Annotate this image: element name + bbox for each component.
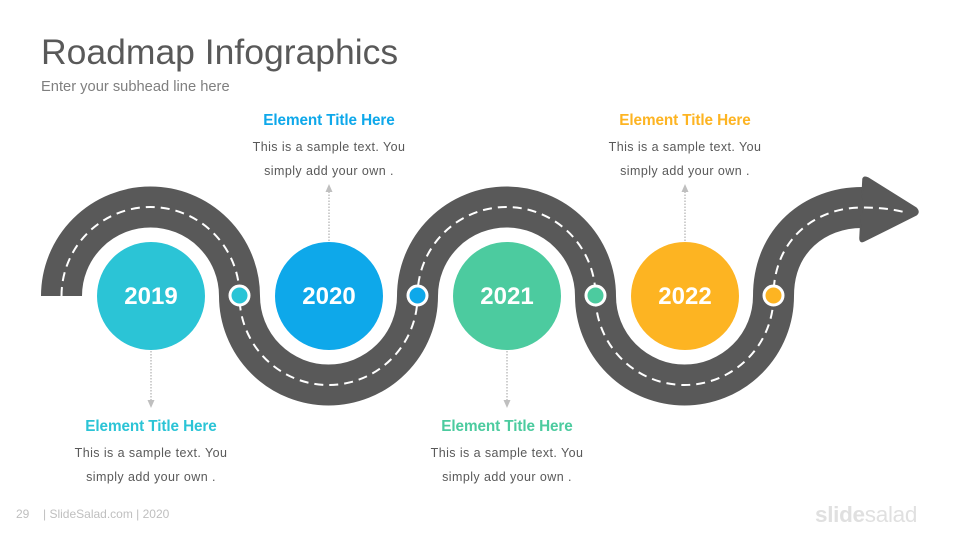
text block: 2021 (430, 418, 583, 484)
text block: 2021: simply add your own . (442, 470, 572, 484)
text block: 2020 (252, 112, 405, 178)
road marker: teal (230, 286, 249, 305)
text block: 2022 (608, 112, 761, 178)
text block: 2020: Element Title Here (263, 112, 395, 129)
road with arrow (62, 177, 918, 385)
circle: 2020: 2020 (302, 283, 356, 310)
circle: 2021: 2021 (480, 283, 534, 310)
arrow: 2021 down (504, 351, 510, 408)
text block: 2019: This is a sample text. You (75, 446, 227, 460)
circle: 2022: 2022 (658, 283, 712, 310)
title: Roadmap Infographics (41, 32, 398, 72)
text block: 2019: Element Title Here (85, 418, 217, 435)
text block: 2020: This is a sample text. You (253, 140, 405, 154)
circle: 2020 (275, 242, 383, 350)
circle: 2022 (631, 242, 739, 350)
text block: 2022: simply add your own . (620, 164, 750, 178)
arrow: 2019 down (148, 351, 154, 408)
arrow: 2020 up (326, 184, 332, 241)
text block: 2022: Element Title Here (619, 112, 751, 129)
text block: 2019: simply add your own . (86, 470, 216, 484)
footer logo: slidesalad (815, 502, 917, 527)
road marker: green (586, 286, 605, 305)
circle: 2021 (453, 242, 561, 350)
circle: 2019: 2019 (124, 283, 178, 310)
road marker: amber (764, 286, 783, 305)
road marker: blue (408, 286, 427, 305)
text block: 2020: simply add your own . (264, 164, 394, 178)
text block: 2021: This is a sample text. You (431, 446, 583, 460)
circle: 2019 (97, 242, 205, 350)
text block: 2021: Element Title Here (441, 418, 573, 435)
footer page number: 29 (16, 507, 29, 521)
text block: 2019 (74, 418, 227, 484)
text block: 2022: This is a sample text. You (609, 140, 761, 154)
subtitle: Enter your subhead line here (41, 79, 230, 95)
arrow: 2022 up (682, 184, 688, 241)
footer text: | SlideSalad.com | 2020 (43, 507, 169, 521)
